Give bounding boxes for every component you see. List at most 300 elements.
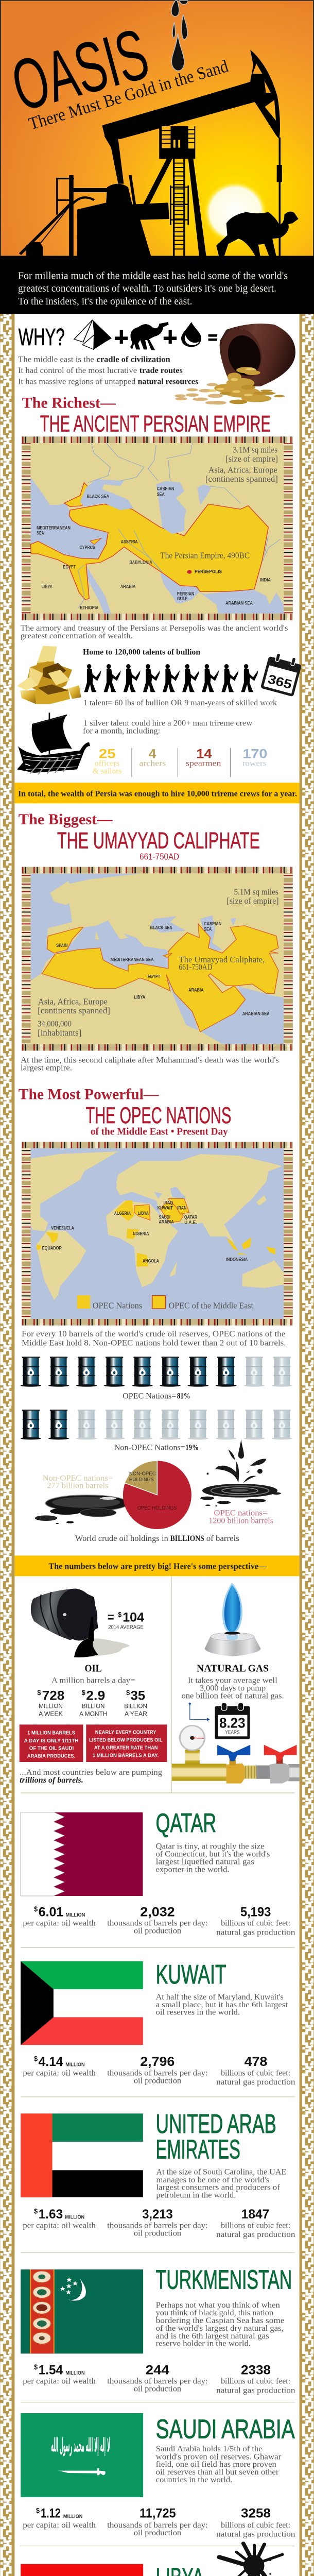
map labels: QATAR	[184, 1215, 197, 1220]
why text: cradle of civilization	[97, 355, 170, 364]
heading: the richest: The Richest—	[22, 395, 116, 412]
stats: Saudi Arabia: MILLION	[63, 2514, 82, 2519]
map labels: CYPRUS	[79, 545, 95, 550]
label: OPEC holdings: OPEC nations=	[214, 1509, 267, 1517]
why text: trade routes	[139, 366, 183, 375]
stats: Saudi Arabia	[23, 2506, 295, 2538]
stats: Qatar: thousands of barrels per day:	[107, 1919, 208, 1927]
map labels: U.A.E.	[184, 1220, 197, 1225]
map labels: LIBYA	[42, 584, 53, 589]
flag: Kuwait	[21, 1961, 143, 2045]
icon: tipped oil barrel	[31, 1586, 130, 1657]
stats: UAE: billions of cubic feet:	[221, 2221, 290, 2230]
stat: per year: 35	[131, 1688, 145, 1703]
stats: Saudi Arabia: 1.12	[41, 2506, 61, 2520]
stats: Turkmenistan: per capita: oil wealth	[23, 2377, 96, 2385]
stats: Turkmenistan: natural gas production	[216, 2386, 295, 2395]
why text	[18, 355, 198, 386]
bullion heading: Home to 120,000 talents of bullion	[83, 648, 200, 656]
text: UAE: petroleum in the world.	[156, 2191, 236, 2199]
stat: per month	[79, 1688, 108, 1717]
flag: UAE	[21, 2113, 143, 2197]
text: Kuwait: At half the size of Maryland, Kuwait's	[156, 1992, 284, 2002]
barrels: OPEC	[21, 1357, 292, 1387]
text: Qatar: exporter in the world.	[156, 1865, 229, 1874]
text: Kuwait	[156, 1992, 288, 2016]
stat: per month: $	[82, 1689, 85, 1697]
title: Kuwait: KUWAIT	[156, 1959, 226, 1989]
icon: calendar 8.23 years: YEARS	[225, 1730, 240, 1735]
map labels: SEA	[204, 927, 212, 932]
stats: Saudi Arabia: thousands of barrels per day:	[107, 2520, 208, 2530]
icon: camel silhouette	[216, 212, 299, 258]
trireme text	[83, 719, 253, 735]
stat: spearmen: 14	[196, 747, 212, 761]
heading: the biggest: The Biggest—	[19, 811, 113, 828]
stats: Qatar: 6.01	[39, 1904, 63, 1919]
map stats: The Umayyad Caliphate,	[179, 955, 265, 964]
chart caption: of barrels	[206, 1534, 239, 1543]
why text: The middle east is the	[18, 355, 94, 364]
map labels: ARABIA	[188, 988, 204, 993]
talent definition: 1 talent= 60 lbs of bullion OR 9 man-years of skilled work	[83, 698, 277, 707]
text: Qatar: of Connecticut, but it's the world's	[156, 1850, 270, 1858]
text: Turkmenistan: and is the 6th largest natural gas	[156, 2331, 269, 2341]
section: oil reserves	[14, 1329, 300, 1576]
stat: barrel price: $	[118, 1611, 122, 1619]
stat: archers	[139, 747, 166, 768]
stats: Qatar: 2,032	[140, 1904, 175, 1919]
country: Qatar	[21, 1808, 295, 1947]
stats: UAE: 3,213	[142, 2207, 173, 2222]
stats: Kuwait: 4.14	[39, 2054, 63, 2069]
icon: oil drips	[171, 1, 188, 71]
stats: Qatar: natural gas production	[216, 1928, 295, 1937]
stat: officers: & sailors	[93, 767, 122, 775]
stats: UAE: oil production	[134, 2229, 181, 2238]
map labels: ANGOLA	[143, 1259, 159, 1264]
stats: Kuwait: 2,796	[140, 2054, 175, 2069]
map labels: PERSIAN	[177, 591, 194, 597]
stat: per year: A YEAR	[125, 1710, 147, 1717]
icon: gas burner	[205, 1583, 261, 1656]
callout: one eleventh: OF THE OIL SAUDI	[29, 1745, 74, 1751]
icon: equals	[208, 334, 217, 341]
icon: oil drop	[181, 322, 201, 347]
icon: calendar 8.23 years: 8.23	[219, 1715, 246, 1731]
text: Qatar: Qatar is tiny, at roughly the size	[156, 1842, 265, 1851]
stat: officers: officers	[95, 759, 119, 768]
callout: greater rate	[86, 1724, 167, 1762]
map: Persian Empire	[22, 436, 293, 620]
icon: calendar 365	[260, 651, 303, 697]
stat: officers: 25	[99, 747, 116, 761]
stats: Kuwait: per capita: oil wealth	[23, 2069, 96, 2077]
caption: caliphate: largest empire.	[21, 1063, 72, 1072]
stat: spearmen: spearmen	[186, 759, 221, 768]
map labels: MEDITERRANEAN SEA	[111, 957, 153, 962]
map labels: EGYPT	[148, 974, 160, 979]
map labels: LIBYA	[138, 1211, 149, 1216]
text: UAE: At the size of South Carolina, the UAE	[156, 2167, 286, 2176]
map legend: OPEC of the Middle East	[169, 1301, 253, 1310]
reserves text	[22, 1329, 286, 1347]
map labels: GULF	[177, 597, 187, 602]
label: non-OPEC holdings	[43, 1473, 113, 1490]
sub-heading: of the Middle East • Present Day	[91, 1126, 228, 1137]
map labels: INDIA	[260, 578, 271, 583]
pie chart: world oil holdings	[123, 1461, 191, 1529]
country: Libya	[20, 2544, 295, 2576]
heading: natural gas: NATURAL GAS	[197, 1663, 269, 1674]
callout: one eleventh: ARABIA PRODUCES.	[27, 1753, 75, 1759]
stat: per week: A WEEK	[39, 1710, 63, 1717]
map labels: IRAN	[177, 1206, 187, 1211]
note: trillions	[20, 1768, 162, 1785]
flag: Saudi Arabia	[21, 2413, 143, 2497]
label: non-OPEC holdings: 277 billion barrels	[47, 1481, 109, 1490]
icon: pressure gauge	[179, 1725, 205, 1764]
gas text: It takes your average well	[188, 1676, 277, 1685]
map stats: 3.1M sq miles	[233, 445, 277, 454]
stat: per year	[124, 1688, 147, 1717]
pie chart: world oil holdings: HOLDINGS	[129, 1477, 154, 1483]
text: Saudi Arabia: Saudi Arabia holds 1/5th of the	[156, 2444, 263, 2453]
text: Turkmenistan: of the world's largest dry natural gas,	[156, 2324, 284, 2333]
stats: Kuwait: oil production	[134, 2076, 181, 2085]
map stats: The Persian Empire, 490BC	[160, 551, 250, 560]
caption: persepolis: greatest concentration of wealth.	[21, 631, 133, 640]
icon: pot of coins	[175, 324, 295, 404]
map stats: 34,000,000	[38, 1019, 72, 1028]
country: Kuwait	[21, 1959, 295, 2097]
icon: camel	[130, 322, 169, 350]
caption: caliphate: At the time, this second caliphate after Muhammad's death was the world's	[21, 1056, 279, 1064]
stats: UAE: per capita: oil wealth	[23, 2221, 96, 2230]
map labels: BLACK SEA	[150, 925, 172, 930]
text: Turkmenistan: you think of black gold, this nation	[156, 2308, 273, 2317]
map stats: [continents spanned]	[38, 1006, 110, 1015]
stats: UAE: 1847	[241, 2207, 269, 2222]
map labels: ARABIA	[120, 584, 135, 589]
section: persian wealth	[17, 623, 303, 777]
map stats: [inhabitants]	[38, 1028, 81, 1038]
icon: trireme ship	[17, 713, 90, 774]
callout: trireme crews	[14, 783, 300, 803]
barrels: non-OPEC	[21, 1410, 292, 1439]
stats: Saudi Arabia: $	[36, 2506, 40, 2515]
stat: barrel price	[108, 1609, 145, 1630]
arrow: gauge to calendar	[188, 1703, 210, 1721]
section: oil and gas perspective	[20, 1577, 300, 1793]
stat: rowers: 170	[243, 747, 267, 761]
title: Qatar: QATAR	[156, 1808, 216, 1838]
gas text: 3,000 days to pump	[200, 1684, 266, 1692]
stat: per month: 2.9	[86, 1688, 105, 1703]
text: UAE: manages to be one of the world's	[156, 2175, 269, 2184]
icon: pyramids	[74, 320, 112, 349]
label: non-OPEC share: Non-OPEC Nations=	[114, 1443, 185, 1452]
stats: Saudi Arabia: natural gas production	[216, 2530, 295, 2538]
text: Saudi Arabia: countries in the world.	[156, 2475, 232, 2484]
map labels: BLACK SEA	[86, 494, 109, 499]
map labels: ALGERIA	[114, 1211, 131, 1216]
icon: oil splash right	[200, 1439, 281, 1506]
callout: greater rate: NEARLY EVERY COUNTRY	[95, 1730, 156, 1735]
gas text: one billion feet of natural gas.	[181, 1691, 284, 1700]
flag: Qatar	[21, 1812, 143, 1896]
country: United Arab Emirates	[21, 2109, 295, 2252]
icon: pipes and valves	[172, 1745, 300, 1784]
map legend: OPEC Nations	[93, 1301, 142, 1310]
stat: rowers	[242, 747, 267, 768]
intro panel: To the insiders, it's the opulence of the east.	[18, 296, 192, 307]
subtitle: There Must Be Gold in the Sand	[27, 57, 231, 134]
stats: Kuwait: thousands of barrels per day:	[107, 2069, 208, 2077]
stats: Qatar	[23, 1904, 295, 1937]
icon: plus	[115, 330, 128, 344]
stats: UAE: 1.63	[39, 2207, 63, 2222]
map labels: SAUDI	[159, 1215, 170, 1220]
map labels: EQUADOR	[42, 1246, 62, 1251]
pie chart: world oil holdings: NON-OPEC	[129, 1471, 156, 1477]
gas text	[181, 1676, 284, 1700]
map labels: VENEZUELA	[51, 1226, 74, 1231]
panel: natural gas	[172, 1583, 300, 1784]
stats: Turkmenistan: $	[34, 2363, 38, 2371]
stat: per week: 728	[42, 1688, 64, 1703]
stats: Turkmenistan: MILLION	[65, 2370, 85, 2376]
map labels: ARABIAN SEA	[242, 1011, 270, 1016]
hero banner: oil pump at sunset	[0, 0, 314, 263]
map stats	[160, 445, 278, 560]
stats: Saudi Arabia: 3258	[241, 2506, 271, 2520]
stats: Qatar: oil production	[134, 1926, 181, 1935]
stat: archers: archers	[139, 759, 166, 768]
stats: Turkmenistan: 2338	[241, 2362, 271, 2377]
chart caption	[75, 1534, 239, 1543]
stat: per month: A MONTH	[79, 1710, 108, 1717]
title: UAE: EMIRATES	[156, 2134, 240, 2164]
map stats: Asia, Africa, Europe	[38, 997, 108, 1006]
reserves text: For every 10 barrels of the world's crude oil reserves, OPEC nations of the	[22, 1329, 286, 1338]
text: Saudi Arabia: world's proven oil reserves. Ghawar	[156, 2452, 281, 2461]
map labels: NIGERIA	[133, 1231, 149, 1236]
stats: Saudi Arabia: per capita: oil wealth	[23, 2520, 96, 2530]
stats: Turkmenistan: billions of cubic feet:	[221, 2377, 290, 2385]
stats: Kuwait: 478	[245, 2054, 267, 2069]
map labels: KUWAIT	[158, 1206, 173, 1211]
map stats	[38, 887, 279, 1038]
icon: calendar 365: 365	[266, 672, 293, 692]
stats: Turkmenistan	[23, 2362, 295, 2395]
why text: natural resources	[138, 377, 198, 386]
panel: oil	[20, 1586, 167, 1785]
stats: UAE: MILLION	[65, 2214, 84, 2220]
stat: archers: 4	[149, 747, 156, 761]
stat: per year: $	[126, 1689, 130, 1697]
section: Umayyad headings	[19, 811, 260, 862]
stats: Turkmenistan: 1.54	[39, 2362, 63, 2377]
trireme text: for a month, including:	[83, 726, 160, 735]
stats: UAE: thousands of barrels per day:	[107, 2221, 208, 2230]
flag: Turkmenistan	[21, 2269, 143, 2353]
text: Turkmenistan: bordering the Caspian Sea has some	[156, 2316, 285, 2325]
text: Turkmenistan: Perhaps not what you think of when	[156, 2300, 280, 2310]
stats: UAE: $	[34, 2208, 38, 2215]
map stats: 5.1M sq miles	[234, 887, 278, 896]
map labels: SPAIN	[56, 943, 67, 948]
stats: Qatar: per capita: oil wealth	[23, 1919, 96, 1927]
stats: Qatar: $	[34, 1905, 38, 1913]
callout: greater rate: 1 MILLION BARRELS A DAY.	[93, 1753, 159, 1758]
stat: per month: BILLION	[82, 1703, 104, 1709]
stats: Turkmenistan: oil production	[134, 2384, 181, 2393]
callout: greater rate: LISTED BELOW PRODUCES OIL	[89, 1737, 163, 1743]
stats: Turkmenistan: 244	[146, 2362, 169, 2377]
title: UAE	[156, 2109, 276, 2164]
map legend	[77, 1295, 253, 1310]
heading: the most powerful: The Most Powerful—	[19, 1086, 159, 1103]
oil subtitle: A million barrels a day=	[51, 1676, 135, 1685]
caption: persepolis: The armory and treasury of the Persians at Persepolis was the ancient world's	[21, 623, 288, 633]
stat: barrel price: 104	[123, 1609, 145, 1624]
stats: Kuwait: billions of cubic feet:	[221, 2069, 290, 2077]
trireme text: 1 silver talent could hire a 200+ man trireme crew	[83, 719, 253, 727]
map labels: BABYLONIA	[129, 560, 152, 565]
stat: per week: $	[37, 1689, 41, 1697]
dates: 661-750AD	[139, 852, 179, 862]
callout: one eleventh: 1 MILLION BARRELS	[27, 1730, 75, 1736]
map labels: ASSYRIA	[121, 539, 138, 545]
map labels: SEA	[37, 531, 44, 536]
map labels: LIBYA	[134, 995, 145, 1000]
intro panel	[0, 256, 314, 314]
stats: Kuwait: MILLION	[65, 2062, 85, 2067]
callout: one eleventh	[20, 1724, 83, 1762]
chart caption: BILLIONS	[170, 1534, 204, 1543]
stats: Kuwait: natural gas production	[216, 2077, 295, 2087]
map labels: MEDITERRANEAN	[37, 526, 71, 531]
label: non-OPEC holdings: Non-OPEC nations=	[43, 1473, 113, 1483]
text: Turkmenistan: reserve holder in the world.	[156, 2339, 251, 2348]
map labels: ARABIA	[159, 1219, 174, 1225]
stats: Qatar: MILLION	[66, 1912, 85, 1918]
stats: UAE	[23, 2207, 295, 2239]
stats: Saudi Arabia: billions of cubic feet:	[221, 2520, 290, 2530]
stat: spearmen	[186, 747, 221, 768]
stats: Saudi Arabia: 11,725	[139, 2506, 176, 2520]
stats: Kuwait	[23, 2054, 295, 2087]
flag: Libya	[21, 2564, 143, 2576]
map labels	[42, 1200, 248, 1264]
reserves text: Middle East hold 8. Non-OPEC nations hold fewer than 2 out of 10 barrels.	[22, 1338, 286, 1347]
map stats: [size of empire]	[226, 896, 279, 906]
icon: nine skilled workers	[84, 664, 258, 692]
map labels: PERSEPOLIS	[195, 569, 222, 574]
stat: barrel price: 2014 AVERAGE	[108, 1624, 144, 1630]
stat: per week: MILLION	[39, 1703, 63, 1709]
callout: perspective	[14, 1555, 300, 1576]
map labels: CASPIAN	[204, 922, 221, 927]
text: Qatar: largest liquefied natural gas	[156, 1857, 254, 1866]
map stats: Asia, Africa, Europe	[208, 465, 277, 474]
map labels: ETHIOPIA	[80, 605, 98, 611]
stat: per year: BILLION	[124, 1703, 147, 1709]
country: Saudi Arabia	[20, 2413, 295, 2546]
country: Turkmenistan	[21, 2265, 295, 2402]
chart caption: World crude oil holdings in	[75, 1534, 168, 1543]
label: OPEC holdings	[208, 1509, 273, 1525]
stat: rowers: rowers	[242, 759, 267, 768]
label: non-OPEC share: 19%	[185, 1443, 199, 1452]
map stats: [size of empire]	[225, 454, 278, 464]
text: Kuwait: a small place, but it has the 6th largest	[156, 2000, 288, 2009]
stats: UAE: natural gas production	[216, 2230, 295, 2239]
pump jack silhouette	[20, 50, 282, 258]
map: Umayyad Caliphate	[22, 867, 293, 1050]
label: OPEC holdings: 1200 billion barrels	[208, 1516, 273, 1525]
caption: persepolis	[21, 623, 288, 640]
pie chart: world oil holdings: OPEC HOLDINGS	[137, 1505, 177, 1511]
icon: gold bars	[17, 646, 81, 704]
stat: per week	[37, 1688, 64, 1717]
map labels	[37, 486, 271, 611]
text: UAE: largest consumers and producers of	[156, 2183, 280, 2192]
section: OPEC headings	[19, 1056, 279, 1137]
map stats: [continents spanned]	[205, 474, 278, 484]
stats: Turkmenistan: thousands of barrels per day:	[107, 2377, 208, 2385]
why text: It has massive regions of untapped	[18, 377, 136, 386]
map labels: SEA	[157, 492, 165, 497]
map labels: ARABIAN SEA	[225, 601, 253, 606]
stats: Kuwait: $	[34, 2055, 38, 2063]
caption: caliphate	[21, 1056, 279, 1072]
text: Qatar	[156, 1842, 270, 1874]
stats: Saudi Arabia: oil production	[134, 2528, 181, 2537]
icon: calendar 8.23 years	[215, 1703, 250, 1739]
callout: greater rate: AT A GREATER RATE THAN	[94, 1745, 158, 1751]
map: OPEC world	[22, 1142, 293, 1326]
label: OPEC share: 81%	[177, 1392, 190, 1400]
icon: oil splat	[219, 2544, 283, 2576]
map labels	[56, 922, 270, 1016]
text: Saudi Arabia: field, one oil field has more proven	[156, 2460, 276, 2469]
stat: officers	[93, 747, 122, 775]
map labels: INDONESIA	[226, 1257, 248, 1262]
text: Kuwait: oil reserves in the world.	[156, 2008, 240, 2016]
stats: Qatar: 5,193	[240, 1904, 271, 1919]
stats: Qatar: billions of cubic feet:	[221, 1919, 290, 1927]
text: Turkmenistan	[156, 2300, 285, 2348]
label: OPEC share: OPEC Nations=	[123, 1392, 176, 1400]
section: why	[18, 320, 295, 436]
map labels: IRAQ	[163, 1200, 173, 1206]
map stats: 661-750AD	[179, 962, 212, 972]
note: trillions: trillions of barrels.	[20, 1775, 83, 1785]
icon: plus	[164, 330, 177, 344]
heading: oil: OIL	[85, 1663, 102, 1674]
text: UAE	[156, 2167, 286, 2199]
icon: oil puddle left	[35, 1495, 129, 1524]
why text: It had control of the most lucrative	[18, 366, 137, 375]
stat: barrel price: =	[108, 1609, 114, 1624]
text: Saudi Arabia: oil reserves than all but seven other	[156, 2467, 279, 2477]
note: trillions: ...And most countries below are pumping	[20, 1768, 162, 1777]
text: Saudi Arabia	[156, 2444, 281, 2484]
callout: one eleventh: A DAY IS ONLY 1/11TH	[24, 1738, 79, 1744]
map labels: CASPIAN	[157, 486, 174, 492]
